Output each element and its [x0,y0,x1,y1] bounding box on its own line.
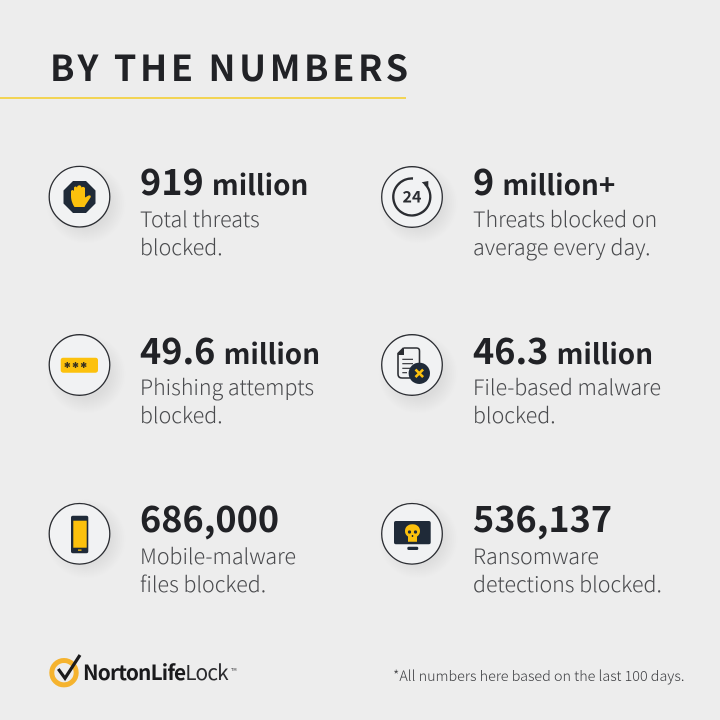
icon: mobile phone [48,502,118,571]
footnote: *All numbers here based on the last 100 days. [393,665,684,686]
stat: total threats: 919 million [140,154,308,206]
icon: stop hand [48,166,118,236]
title underline [0,97,406,99]
stat: mobile malware: 686,000 [140,490,279,542]
stat: phishing: blocked. [140,399,223,430]
stat: file-based malware: blocked. [473,399,556,430]
logo: NortonLifeLock: TM [231,667,237,673]
stat: phishing [140,322,320,430]
stat: phishing: 49.6 million [140,322,320,374]
stat: daily threats: 9 million+ [473,154,615,206]
stat: mobile malware [140,490,296,599]
stat: total threats: blocked. [140,231,223,262]
stat: file-based malware: File-based malware [473,370,661,402]
icon: monitor with skull [381,502,450,571]
stat: mobile malware: Mobile-malware [140,540,296,570]
stat: daily threats: Threats blocked on [473,202,657,234]
stat: ransomware: 536,137 [473,490,612,542]
stat: ransomware: detections blocked. [473,568,662,599]
stat: ransomware: Ransomware [473,540,599,570]
icon: malware file [381,334,450,406]
stat: phishing: Phishing attempts [140,370,314,402]
stat: mobile malware: files blocked. [140,568,266,599]
logo: NortonLifeLock: NortonLifeLock [83,656,229,686]
stat: total threats: Total threats [140,202,260,234]
stat: file-based malware [473,322,661,430]
stat: daily threats: average every day. [473,231,650,262]
icon: 24 hour cycle [381,166,450,236]
stat: ransomware [473,490,662,599]
icon: password field [48,334,118,406]
icon: 24 hour cycle: 24 [403,184,421,208]
stat: file-based malware: 46.3 million [473,322,653,374]
logo: NortonLifeLock [49,654,237,688]
stat: daily threats [473,154,657,262]
stat: total threats [140,154,308,262]
title: BY THE NUMBERS [50,40,412,92]
